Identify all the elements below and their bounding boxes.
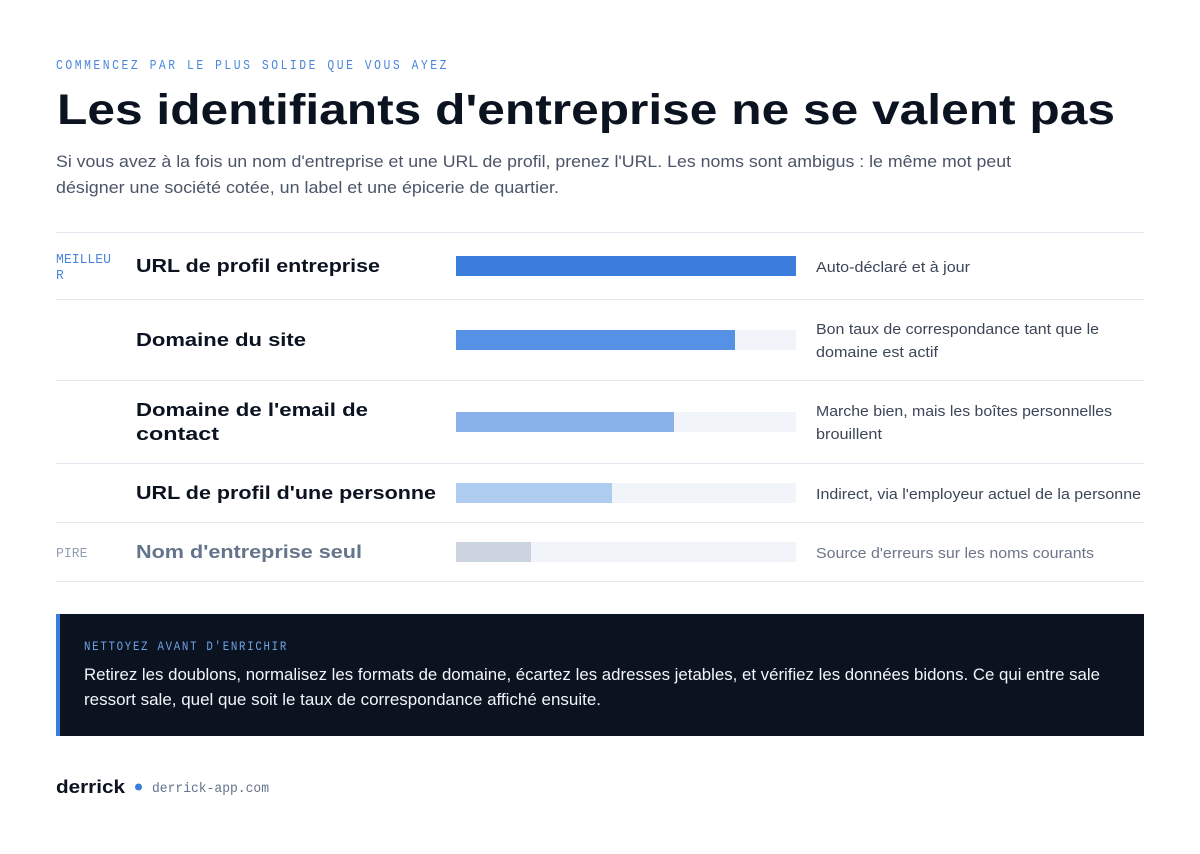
- brand dot: [135, 784, 142, 790]
- callout label: NETTOYEZ AVANT D'ENRICHIR: [84, 640, 288, 654]
- subtitle: [56, 152, 1011, 197]
- row: URL de profil d'une personne: [136, 482, 1141, 503]
- footer: [56, 776, 269, 797]
- row note: Source d'erreurs sur les noms courants: [816, 545, 1094, 562]
- row note: domaine est actif: [816, 344, 939, 361]
- row heading: contact: [136, 423, 219, 444]
- row heading: URL de profil d'une personne: [136, 482, 436, 503]
- row note: Auto-déclaré et à jour: [816, 259, 970, 276]
- bar: [456, 256, 796, 276]
- callout: [56, 614, 1144, 736]
- bar: [456, 542, 796, 562]
- row heading: [136, 399, 368, 444]
- row heading: Domaine du site: [136, 329, 306, 350]
- rank label: pire: PIRE: [56, 547, 88, 562]
- row heading: Domaine de l'email de: [136, 399, 368, 420]
- callout text: ressort sale, quel que soit le taux de correspondance affiché ensuite.: [84, 691, 601, 709]
- row note: Marche bien, mais les boîtes personnelles: [816, 403, 1112, 420]
- row note: Bon taux de correspondance tant que le: [816, 321, 1099, 338]
- row heading: URL de profil entreprise: [136, 255, 380, 276]
- row note: brouillent: [816, 426, 883, 443]
- subtitle: désigner une société cotée, un label et une épicerie de quartier.: [56, 178, 559, 197]
- rank label: meilleur: R: [56, 269, 64, 284]
- bar: [456, 483, 796, 503]
- callout text: Retirez les doublons, normalisez les formats de domaine, écartez les adresses jetables, et vérifiez les données bidons. Ce qui entre sale: [84, 666, 1100, 684]
- bar: [456, 330, 796, 350]
- row: URL de profil entreprise: [56, 253, 970, 284]
- eyebrow: COMMENCEZ PAR LE PLUS SOLIDE QUE VOUS AYEZ: [56, 59, 449, 74]
- brand name: derrick: [56, 776, 126, 797]
- row note: Indirect, via l'employeur actuel de la personne: [816, 486, 1141, 503]
- subtitle: Si vous avez à la fois un nom d'entreprise et une URL de profil, prenez l'URL. Les noms sont ambigus : le même mot peut: [56, 152, 1011, 171]
- row note: [816, 321, 1099, 361]
- row: Domaine de l'email de contact: [136, 399, 1112, 444]
- footer url: derrick-app.com: [152, 782, 269, 797]
- callout text: [84, 666, 1100, 709]
- row: Nom d'entreprise seul: [56, 541, 1094, 562]
- row note: [816, 403, 1112, 443]
- row heading: Nom d'entreprise seul: [136, 541, 362, 562]
- rank label: meilleur: MEILLEU: [56, 253, 111, 268]
- rank label: meilleur: [56, 253, 111, 284]
- row: Domaine du site: [136, 321, 1099, 361]
- title: Les identifiants d'entreprise ne se valent pas: [57, 86, 1115, 134]
- bar: [456, 412, 796, 432]
